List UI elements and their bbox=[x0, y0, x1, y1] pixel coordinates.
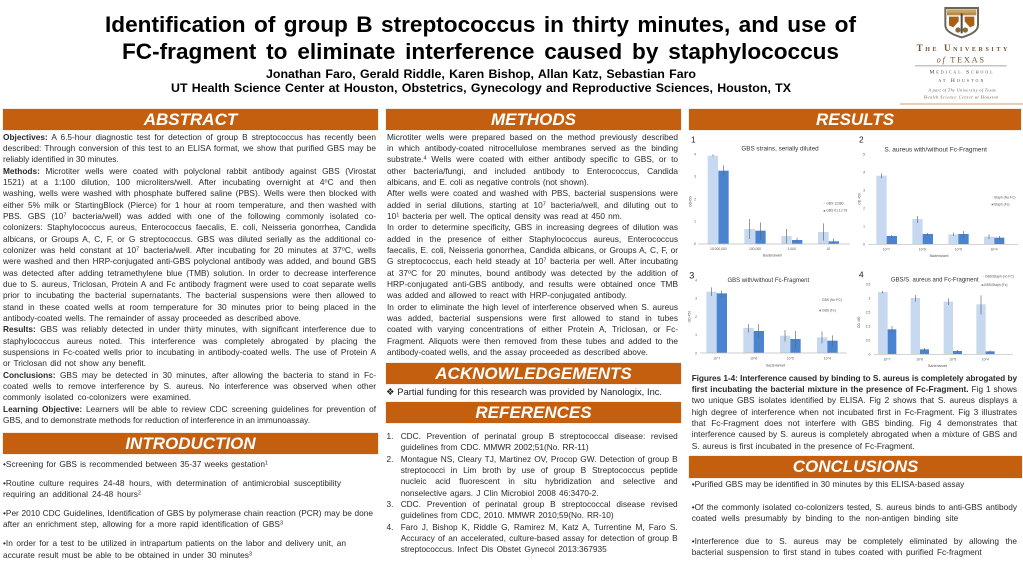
chart 4: GBS/S. aureus and Fc-Fragment: 10^6 bbox=[916, 358, 923, 362]
text: methods: other bacteria/fungi, and included antibody to Enterococcus, Candida bbox=[387, 166, 678, 176]
text: abstract: or Triclosan did not show any benefit. bbox=[3, 358, 146, 368]
text: abstract: suspensions in Fc-coated wells prior to incubating in antibody-coated wells. The use of Protein A bbox=[3, 347, 376, 357]
text: figure caption: high degree of interference when not incubated first in Fc-Fragment. Fig 3 illustrates bbox=[692, 407, 1017, 417]
text: abstract: antibody-coated wells. The remainder of assay proceeded as described above. bbox=[3, 313, 301, 323]
chart 4: GBS/S. aureus and Fc-Fragment: GBS/Staph (Fc) bbox=[984, 283, 1008, 287]
text: methods: coated with varying concentrations of either Protein A, Triclosan, or Fc- bbox=[387, 324, 678, 334]
text: methods: added in serial dilutions, starting at 107 bacteria/well, and diluting out to bbox=[387, 200, 678, 210]
text: introduction: •Routine culture requires 24-48 hours, with determination of antimicrobial susceptibility bbox=[3, 478, 341, 488]
heading: acknowledgements bbox=[386, 363, 681, 384]
text: abstract: washing, wells were washed with phosphate buffered saline (PBS). Wells were then blocked with bbox=[3, 188, 376, 198]
text: methods: In order to eliminate the high level of interference observed when S. aureus bbox=[387, 302, 678, 312]
text: methods: added in the presence of either Staphylococcus aureus, Enterococcus bbox=[387, 234, 678, 244]
text: methods: Microtiter wells were prepared based on the method previously described bbox=[387, 132, 678, 142]
heading: abstract: ABSTRACT bbox=[144, 110, 237, 129]
heading: conclusions: CONCLUSIONS bbox=[793, 457, 918, 476]
heading: acknowledgements: ACKNOWLEDGEMENTS bbox=[435, 364, 632, 383]
chart 2: S. aureus with/without Fc-Fragment: 10^7 bbox=[883, 247, 890, 251]
heading: references: REFERENCES bbox=[475, 403, 592, 422]
text: abstract: due to S. aureus, Triclosan, Protein A and Fc antibody fragment were used to coat separate wells bbox=[3, 279, 376, 289]
chart 4: GBS/S. aureus and Fc-Fragment: 0 bbox=[868, 353, 870, 357]
text: abstract: Methods: Microtiter wells were coated with polyclonal rabbit antibody against GBS (Virostat bbox=[3, 166, 376, 176]
text: references: 2. bbox=[386, 454, 393, 464]
logo: University of Texas Medical School at Houston bbox=[900, 7, 1023, 105]
chart 1: GBS strains, serially diluted bbox=[689, 135, 850, 257]
heading: references bbox=[386, 402, 681, 423]
chart 1: GBS strains, serially diluted: Bacteria/well bbox=[763, 253, 782, 257]
heading: results: RESULTS bbox=[816, 110, 894, 129]
logo: University of Texas Medical School at Houston: A part of The University of Texas bbox=[927, 88, 996, 93]
chart 4: GBS/S. aureus and Fc-Fragment: 10^5 bbox=[949, 358, 956, 362]
text: methods: Fragment. Aliquots were then removed from these tubes and added to the bbox=[387, 336, 678, 346]
chart 2: S. aureus with/without Fc-Fragment: 10^5 bbox=[955, 247, 962, 251]
text: abstract: albicans, or Groups A, C, F, or G streptococcus. GBS was diluted serially as the additional co- bbox=[3, 234, 376, 244]
chart 2: S. aureus with/without Fc-Fragment: Staph (No FC) bbox=[994, 195, 1015, 199]
chart 3: GBS with/without Fc-Fragment: 2 bbox=[695, 315, 697, 319]
chart 3: GBS with/without Fc-Fragment: GBS (No FC) bbox=[822, 298, 842, 302]
chart 4: GBS/S. aureus and Fc-Fragment: 0.5 bbox=[866, 338, 870, 342]
chart 2: S. aureus with/without Fc-Fragment: Bacteria/well bbox=[930, 254, 949, 258]
text: methods: In order to determine specificity, GBS in increasing degrees of dilution was bbox=[387, 222, 678, 232]
title bbox=[105, 12, 856, 64]
chart 3: GBS with/without Fc-Fragment: 3 bbox=[689, 270, 694, 280]
chart 1: GBS strains, serially diluted: 4 bbox=[694, 153, 696, 157]
text: figure caption: Figures 1-4: Interference caused by binding to S. aureus is completely abrogated by bbox=[692, 373, 1017, 383]
logo: University of Texas Medical School at Houston: of TEXAS bbox=[937, 55, 984, 64]
chart 1: GBS strains, serially diluted: GBS 01.12.76 bbox=[826, 209, 847, 213]
chart 3: GBS with/without Fc-Fragment: 10^7 bbox=[713, 357, 720, 361]
text: abstract: Results: GBS was reliably detected in under thirty minutes, with significant interference due to bbox=[3, 324, 376, 334]
text: introduction: requiring an additional 24-48 hours2 bbox=[3, 489, 141, 499]
text: references: Montague NS, Cleary TJ, Martinez OV, Procop GW. Detection of group B bbox=[401, 454, 678, 464]
text: references: nucleic acid fluorescent in situ hybridization and selective and bbox=[401, 476, 678, 486]
text: abstract: colonizers: Staphylococcus aureus, Enterococcus faecalis, E. coli, Neisseria gonorrhea, Candida bbox=[3, 222, 376, 232]
text: methods: antibody-coated wells, and the assay proceeded as described above. bbox=[387, 347, 648, 357]
logo: University of Texas Medical School at Houston: Health Science Center at Houston bbox=[923, 94, 998, 99]
chart 4: GBS/S. aureus and Fc-Fragment: 3.5 bbox=[866, 283, 870, 287]
chart 1: GBS strains, serially diluted: 3 bbox=[694, 175, 696, 179]
chart 4: GBS/S. aureus and Fc-Fragment: Bacteria/well bbox=[928, 364, 947, 368]
text: abstract: reliably identified in 30 minutes. bbox=[3, 154, 119, 164]
text: methods: albicans, and E. coli as negative controls (not shown). bbox=[387, 177, 589, 187]
text: references: 4. bbox=[386, 522, 393, 532]
text: methods: was added, bacterial suspensions were first allowed to stand in tubes bbox=[387, 313, 678, 323]
text: methods: After wells were coated and washed with PBS, bacterial suspensions were bbox=[387, 188, 678, 198]
chart 3: GBS with/without Fc-Fragment: 4 bbox=[695, 279, 697, 283]
text: methods: G streptococcus, each held steady at 107 bacteria per well. After incubating bbox=[387, 256, 678, 266]
heading: introduction bbox=[3, 433, 378, 454]
text: methods bbox=[387, 132, 678, 357]
text: abstract: either 5% milk or StartingBlock (Pierce) for 1 hour at room temperature, and then washed with bbox=[3, 200, 376, 210]
text: figure caption: two unique GBS isolates identified by ELISA. Fig 2 shows that S. aureus displays a bbox=[692, 395, 1017, 405]
chart 1: GBS strains, serially diluted: 1,000 bbox=[787, 247, 796, 251]
text: abstract: Conclusions: GBS may be detected in 30 minutes, after allowing the bacteria to stand in Fc- bbox=[3, 370, 376, 380]
chart 3: GBS with/without Fc-Fragment: 10^4 bbox=[824, 357, 831, 361]
chart 4: GBS/S. aureus and Fc-Fragment bbox=[857, 270, 1014, 368]
text: references bbox=[386, 431, 678, 554]
text: methods: substrate.4 Wells were coated with either antibody specific to GBS, or to bbox=[387, 154, 678, 164]
text: conclusions: •Of the commonly isolated co-colonizers tested, S. aureus binds to anti-GBS antibody bbox=[692, 502, 1017, 512]
chart 2: S. aureus with/without Fc-Fragment: 0 bbox=[863, 243, 865, 247]
heading: conclusions bbox=[689, 456, 1022, 478]
chart 3: GBS with/without Fc-Fragment bbox=[688, 270, 847, 368]
chart 4: GBS/S. aureus and Fc-Fragment: GBS/Staph (no FC) bbox=[985, 274, 1014, 278]
heading: introduction: INTRODUCTION bbox=[125, 434, 256, 453]
text: methods: 101 bacteria per well. The optical density was read at 450 nm. bbox=[387, 211, 622, 221]
text: introduction: accurate result must be able to be obtained in under 30 minutes3 bbox=[3, 550, 252, 560]
chart 2: S. aureus with/without Fc-Fragment: 10^4 bbox=[990, 247, 998, 251]
text: conclusions bbox=[692, 479, 1017, 557]
chart 4: GBS/S. aureus and Fc-Fragment: 3 bbox=[868, 296, 870, 300]
text: abstract: staphylococcus aureus noted. This interference was completely abrogated by placing the bbox=[3, 336, 376, 346]
text: abstract: stand in these coated wells at room temperature for 30 minutes prior to being placed in the bbox=[3, 302, 376, 312]
chart 3: GBS with/without Fc-Fragment: Bacteria/well bbox=[766, 364, 785, 368]
chart 2: S. aureus with/without Fc-Fragment: 4 bbox=[863, 171, 865, 175]
chart 2: S. aureus with/without Fc-Fragment: 5 bbox=[863, 153, 865, 157]
chart 4: GBS/S. aureus and Fc-Fragment: 4 bbox=[859, 270, 864, 280]
text: introduction: •Per 2010 CDC Guidelines, Identification of GBS by polymerase chain reaction (PCR) may be done bbox=[3, 508, 373, 518]
text: references: streptococcus. Infect Dis Obstet Gynecol 2013:367935 bbox=[401, 544, 607, 554]
chart 3: GBS with/without Fc-Fragment: 10^6 bbox=[750, 357, 757, 361]
chart 2: S. aureus with/without Fc-Fragment: OD 450 bbox=[857, 193, 861, 205]
chart 3: GBS with/without Fc-Fragment: 10^5 bbox=[787, 357, 794, 361]
text: acknowledgement: ❖ Partial funding for this research was provided by Nanologix, Inc. bbox=[386, 386, 662, 396]
text: introduction: •In order for a test to be utilized in intrapartum patients on the labor and delivery unit, an bbox=[3, 538, 346, 548]
authors: Jonathan Faro, Gerald Riddle, Karen Bishop, Allan Katz, Sebastian Faro bbox=[266, 67, 696, 81]
text: abstract: were washed and then HRP-conjugated anti-GBS polyclonal antibody was added, and bound GBS bbox=[3, 256, 376, 266]
heading: methods: METHODS bbox=[491, 110, 576, 129]
chart 1: GBS strains, serially diluted: 2 bbox=[694, 197, 696, 201]
chart 1: GBS strains, serially diluted: 10 bbox=[826, 247, 830, 251]
chart 4: GBS/S. aureus and Fc-Fragment: 10^4 bbox=[982, 358, 989, 362]
text: abstract: coated wells to remove interference by S. aureus. No interference was observed when other bbox=[3, 381, 376, 391]
text: introduction bbox=[3, 459, 373, 560]
chart 2: S. aureus with/without Fc-Fragment: 1 bbox=[863, 225, 865, 229]
chart 4: GBS/S. aureus and Fc-Fragment: OD 450 bbox=[857, 316, 861, 328]
chart 1: GBS strains, serially diluted: 0 bbox=[694, 242, 696, 246]
text: figure caption bbox=[692, 373, 1017, 451]
text: abstract: Objectives: A 6.5-hour diagnostic test for detection of group B streptococcus has recently been bbox=[3, 132, 376, 142]
text: figure caption: that Fc-Fragment does not interfere with GBS binding. Fig 4 demonstrates that bbox=[692, 418, 1017, 428]
text: abstract bbox=[3, 132, 376, 425]
text: references: guidelines from CDC. MMWR 2002;51(No. RR-11) bbox=[401, 442, 589, 452]
chart 1: GBS strains, serially diluted: OD450 bbox=[689, 196, 693, 207]
chart 1: GBS strains, serially diluted: GBS 12380 bbox=[826, 202, 844, 206]
text: conclusions: bacterial suspension to first stand in tubes coated with purified Fc-fragment bbox=[692, 547, 982, 557]
chart 3: GBS with/without Fc-Fragment: 1 bbox=[695, 333, 697, 337]
text: methods: was added and allowed to react with HRP-conjugated antibody. bbox=[387, 290, 627, 300]
text: abstract: was detected after adding tetramethylene blue (TMB) solution. In order to decrease interference bbox=[3, 268, 376, 278]
text: methods: HRP-conjugated anti-GBS antibody, and results were obtained once TMB bbox=[387, 279, 678, 289]
chart 1: GBS strains, serially diluted: GBS strains, serially diluted bbox=[741, 145, 819, 152]
text: abstract: 1521) at a 1:100 dilution, 100 microliters/well. After incubating overnight at 4oC and then bbox=[3, 177, 376, 187]
text: methods: at 37oC for 20 minutes, bound antibody was detected by the addition of bbox=[387, 268, 678, 278]
text: abstract: prior to incubating the bacterial supernatants. The bacterial suspensions were then allowed to bbox=[3, 290, 376, 300]
text: references: streptococci in Lim broth by use of group B Streptococcus peptide bbox=[401, 465, 678, 475]
text: references: 3. bbox=[386, 499, 393, 509]
text: references: Accuracy of an accelerated, culture-based assay for detection of group B bbox=[401, 533, 678, 543]
text: references: 1. bbox=[386, 431, 393, 441]
chart 1: GBS strains, serially diluted: 1 bbox=[691, 135, 696, 145]
logo: University of Texas Medical School at Houston: Medical School bbox=[929, 69, 993, 75]
logo: University of Texas Medical School at Houston: at Houston bbox=[938, 78, 983, 84]
chart 3: GBS with/without Fc-Fragment: GBS with/without Fc-Fragment bbox=[727, 278, 810, 284]
chart 2: S. aureus with/without Fc-Fragment: S. aureus with/without Fc-Fragment bbox=[884, 146, 987, 153]
title: Identification of group B streptococcus in thirty minutes, and use of bbox=[105, 12, 856, 37]
chart 2: S. aureus with/without Fc-Fragment: 3 bbox=[863, 189, 865, 193]
heading: abstract bbox=[3, 109, 378, 130]
text: abstract: GBS, and to demonstrate methods for reduction of interference in an immunoassay. bbox=[3, 415, 310, 425]
chart 2: S. aureus with/without Fc-Fragment bbox=[857, 135, 1018, 258]
chart 4: GBS/S. aureus and Fc-Fragment: 2.5 bbox=[866, 310, 870, 314]
text: references: Faro J, Bishop K, Riddle G, Ramirez M, Katz A, Turrentine M, Faro S. bbox=[401, 522, 678, 532]
chart 1: GBS strains, serially diluted: 100,000 bbox=[749, 247, 761, 251]
chart 3: GBS with/without Fc-Fragment: 3 bbox=[695, 297, 697, 301]
text: conclusions: •Purified GBS may be identified in 30 minutes by this ELISA-based assay bbox=[692, 479, 964, 489]
chart 1: GBS strains, serially diluted: 1 bbox=[694, 220, 696, 224]
text: abstract: commonly isolated co-colonizers were examined. bbox=[3, 392, 191, 402]
text: abstract: described: Through conversion of this test to an ELISA format, we show that purified GBS may be bbox=[3, 143, 376, 153]
chart 2: S. aureus with/without Fc-Fragment: 2 bbox=[863, 207, 865, 211]
chart 2: S. aureus with/without Fc-Fragment: 10^6 bbox=[919, 247, 926, 251]
text: figure caption: first incubating the bacterial mixture in the presence of Fc-Fragment. Fig 1 shows bbox=[692, 384, 1017, 394]
chart 2: S. aureus with/without Fc-Fragment: 2 bbox=[859, 135, 864, 145]
text: conclusions: •Interference due to S. aureus may be completely eliminated by allowing the bbox=[692, 536, 1017, 546]
chart 4: GBS/S. aureus and Fc-Fragment: 1.5 bbox=[866, 324, 870, 328]
text: figure caption: S. aureus is first incubated in the presence of Fc-Fragment. bbox=[692, 441, 915, 451]
text: references: guidelines from CDC, 2010. MMWR 2010;59(No. RR-10) bbox=[401, 510, 614, 520]
text: abstract: colonizer was held constant at 107 bacteria/well. After incubating for 20 minutes at 37oC, wells bbox=[3, 245, 376, 255]
text: references: CDC. Prevention of perinatal group B streptococcal disease: revised bbox=[401, 431, 678, 441]
affiliation: UT Health Science Center at Houston, Obstetrics, Gynecology and Reproductive Sciences, Houston, TX bbox=[171, 81, 791, 95]
text: figure caption: interference caused by S. aureus is completely abrogated when a mixture of GBS and bbox=[692, 429, 1017, 439]
text: methods: in which antibody-coated nitrocellulose membranes served as the binding bbox=[387, 143, 678, 153]
chart 3: GBS with/without Fc-Fragment: GBS (Fc) bbox=[822, 308, 836, 312]
title: FC-fragment to eliminate interference caused by staphylococcus bbox=[122, 39, 839, 64]
logo: University of Texas Medical School at Houston: The University bbox=[917, 43, 1008, 53]
text: references: CDC. Prevention of perinatal group B streptococcal disease revised bbox=[401, 499, 678, 509]
text: conclusions: coated wells presumably by binding to the non-antigen binding site bbox=[692, 513, 958, 523]
text: methods: faecalis, E. coli, Neisseria gonorrhea, Candida albicans, or Groups A, C, F, or bbox=[387, 245, 678, 255]
text: abstract: Learning Objective: Learners will be able to review CDC screening guidelines for prevention of bbox=[3, 404, 376, 414]
chart 2: S. aureus with/without Fc-Fragment: Staph (Fc) bbox=[994, 202, 1010, 206]
heading: methods bbox=[386, 109, 681, 130]
heading: results bbox=[689, 109, 1021, 130]
text: introduction: •Screening for GBS is recommended between 35-37 weeks gestation1 bbox=[3, 459, 268, 469]
chart 4: GBS/S. aureus and Fc-Fragment: 10^7 bbox=[883, 358, 891, 362]
chart 1: GBS strains, serially diluted: 10,000,000 bbox=[710, 247, 727, 251]
text: references: nonselective agars. J Clin Microbiol 2008 46:3470-2. bbox=[401, 488, 599, 498]
chart 4: GBS/S. aureus and Fc-Fragment: GBS/S. aureus and Fc-Fragment bbox=[891, 277, 979, 283]
text: introduction: after an enrichment step, allowing for a more rapid identification of GBS3 bbox=[3, 519, 283, 529]
text: abstract: PBS. GBS (107 bacteria/well) was added with one of the following commonly isolated co- bbox=[3, 211, 376, 221]
chart 3: GBS with/without Fc-Fragment: OD 450 bbox=[688, 311, 692, 322]
chart 3: GBS with/without Fc-Fragment: 0 bbox=[695, 351, 697, 355]
